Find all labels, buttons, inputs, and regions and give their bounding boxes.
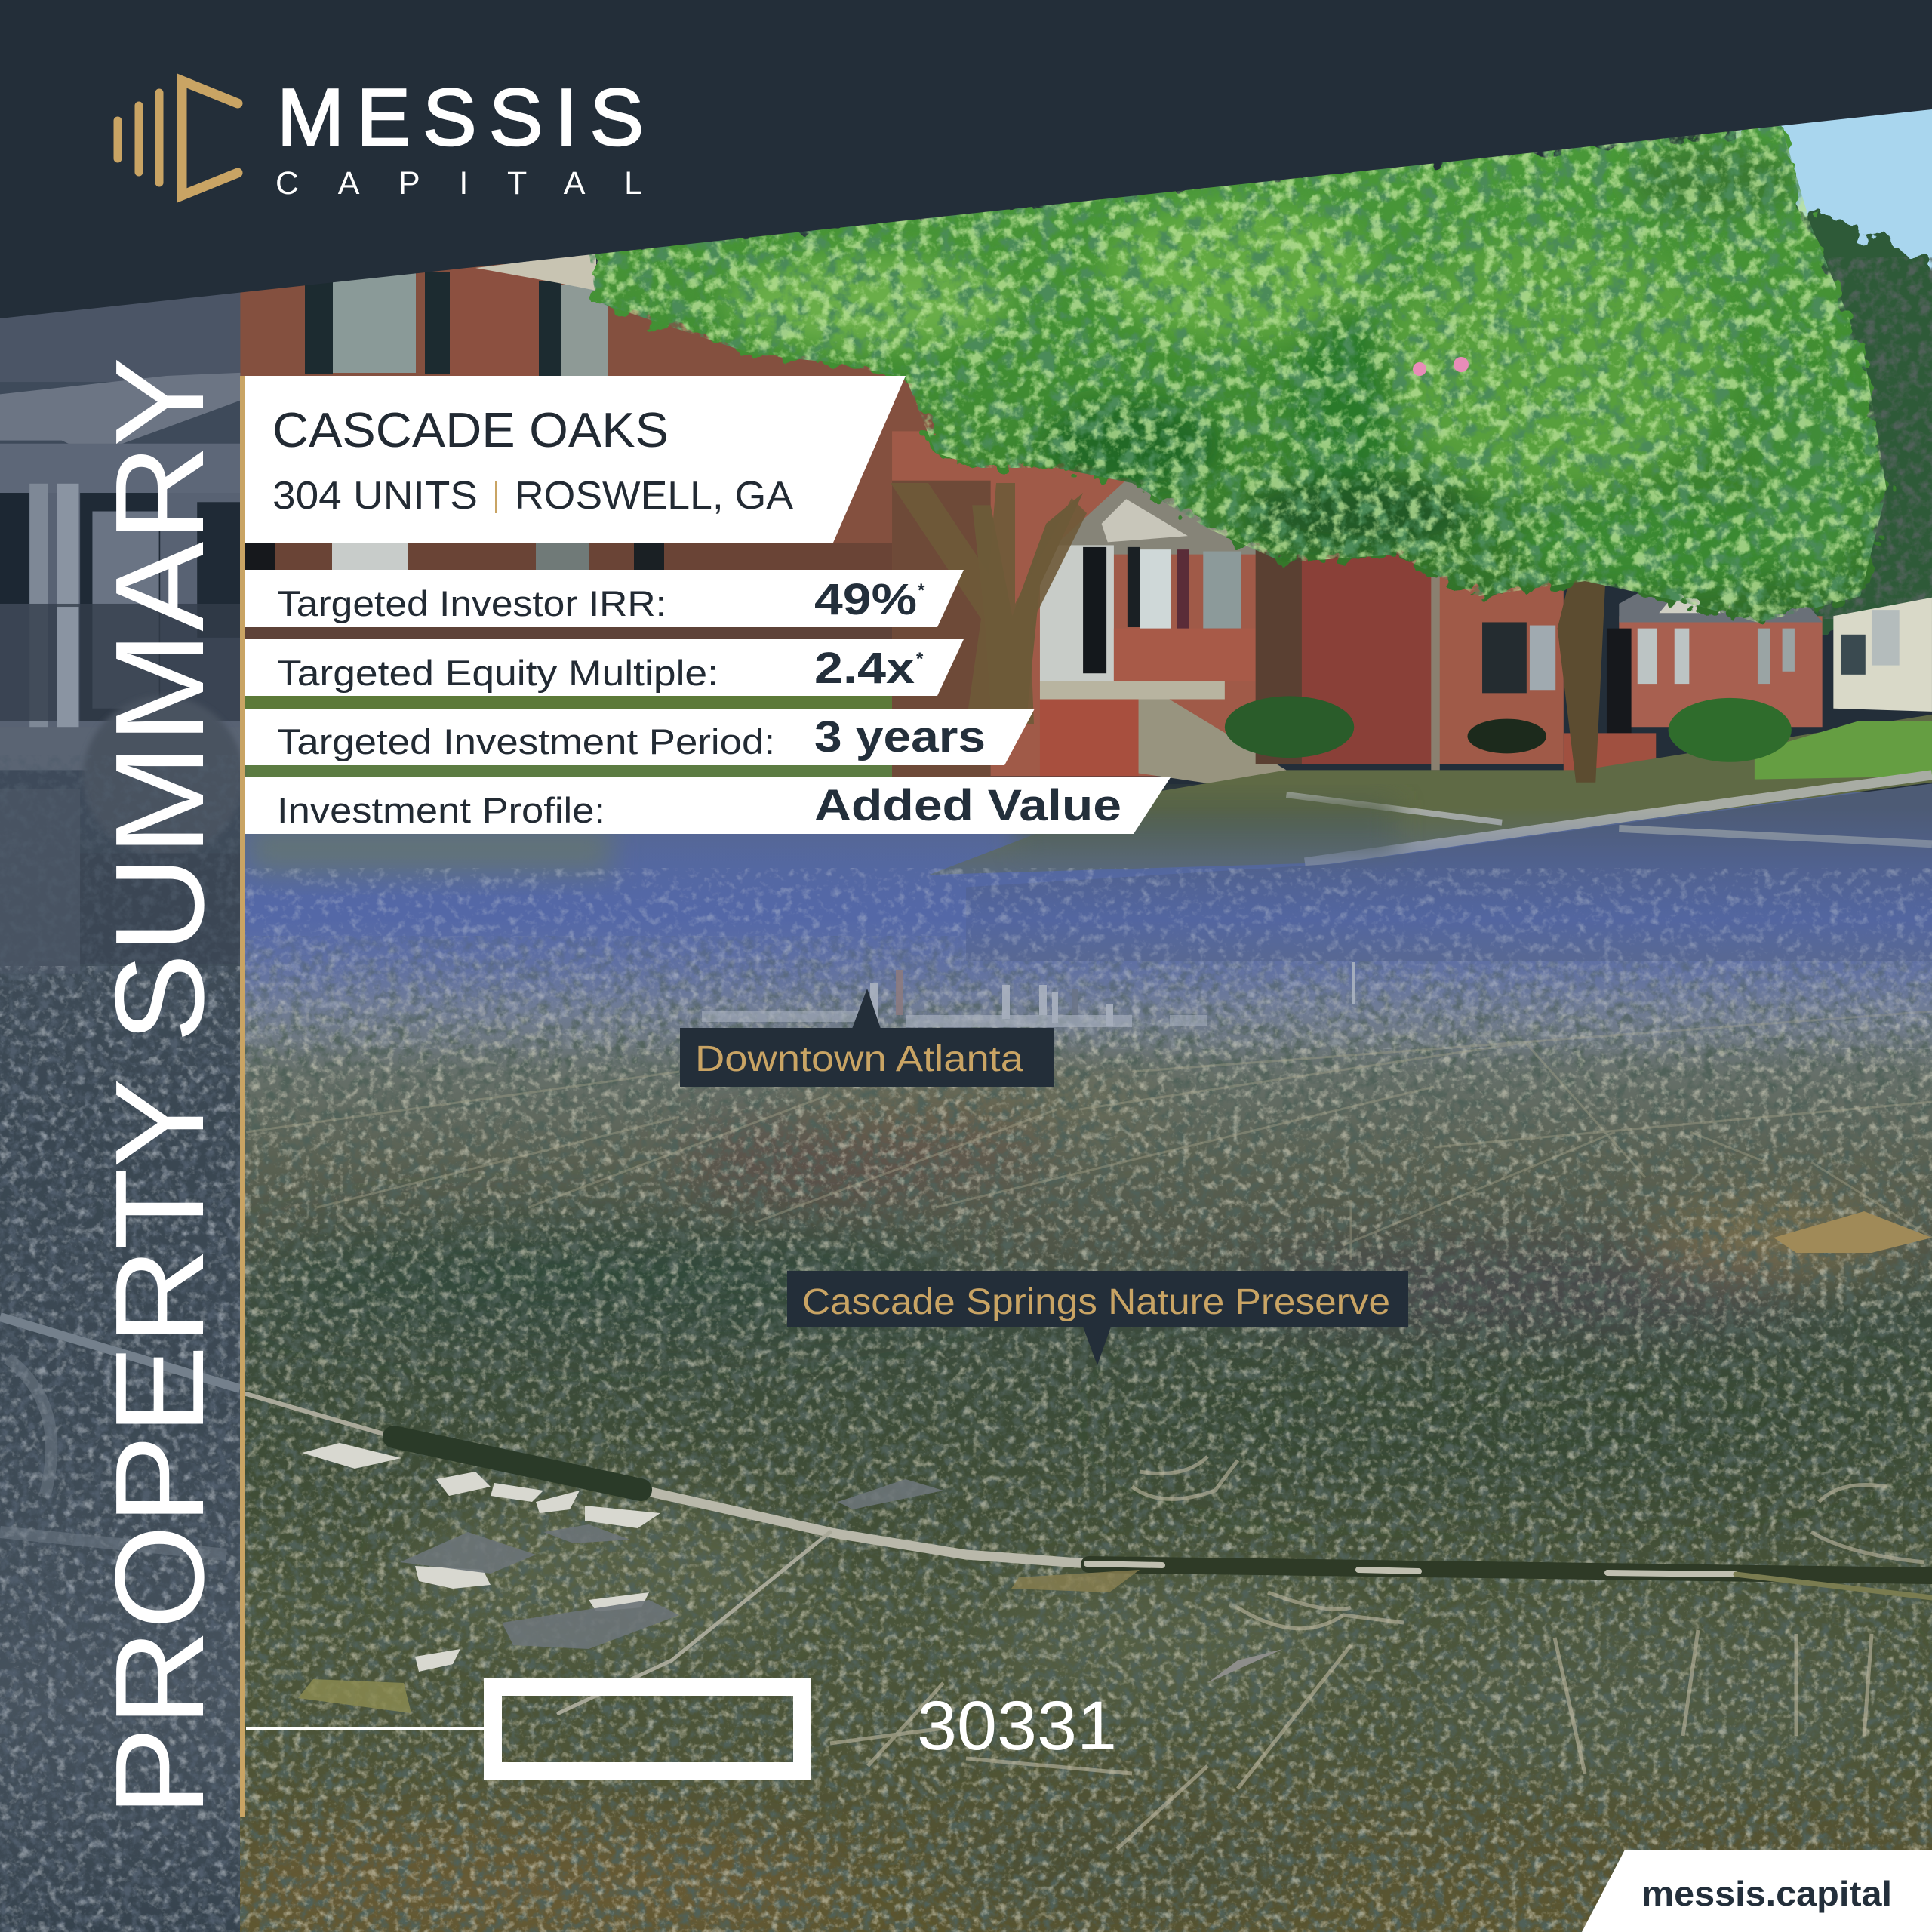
callout: Cascade Springs Nature Preserve [787,1271,1408,1365]
row: investment profile [245,777,1171,834]
grass fade under the info bars [249,800,1396,879]
location marker: zip code box [246,1687,1117,1771]
left grey panel [0,287,243,1932]
row: targeted investor IRR: Targeted Investor IRR: [277,583,666,623]
callout: downtown Atlanta [680,989,1054,1087]
highway [246,1394,1932,1713]
row: targeted investor IRR: * [918,580,925,601]
row: targeted equity multiple: 2.4x [814,644,915,693]
neighbourhood streets [830,1457,1924,1849]
marker frame [493,1687,802,1771]
units and location: 304 UNITS [272,474,478,518]
row: investment profile: Investment Profile: [277,790,605,830]
trunks [1558,555,1607,783]
background trees [1766,151,1932,626]
units and location: ROSWELL, GA [515,474,793,518]
haze texture [240,868,1932,1049]
vertical heading: PROPERTY SUMMARY [90,357,230,1817]
building upper left [240,264,980,641]
footer tab: website: messis.capital [1641,1874,1892,1913]
aerial photo background [240,792,1932,1932]
units and location [272,474,793,518]
logo mark [118,81,238,195]
row: targeted equity multiple: * [916,649,924,669]
row: targeted investor IRR [245,570,964,627]
apartment photo [240,91,1932,961]
logo: Messis Capital [118,72,644,202]
lawn and road [929,715,1932,875]
shrubs [1669,698,1792,762]
row: targeted investment period: 3 years [814,712,986,761]
row: targeted equity multiple [245,639,964,696]
row: targeted investment period [245,709,1035,765]
mid building [892,431,1932,961]
row: targeted investor IRR: 49% [814,575,917,624]
callout: Cascade Springs Nature Preserve: Cascade Springs Nature Preserve [802,1282,1390,1322]
row: targeted equity multiple: Targeted Equity Multiple: [277,653,718,693]
commercial buildings [302,1443,660,1789]
sky [1736,91,1932,287]
distant road grid [246,1011,1932,1260]
row: targeted investment period: Targeted Investment Period: [277,721,775,761]
trailer [1833,598,1932,712]
Atlanta skyline [702,962,1355,1049]
callout: downtown Atlanta: Downtown Atlanta [695,1039,1023,1079]
blue haze transition [240,808,1932,1057]
footer tab: website [1582,1850,1932,1932]
header band [0,0,1932,318]
zip code: 30331 [917,1687,1117,1764]
tagline: CAPITAL [275,165,642,202]
right porch row [1619,616,1823,727]
wordmark: MESSIS [277,72,644,162]
panel: property title [245,376,906,543]
leader line [246,1727,485,1730]
left tree trunks lower [891,483,1087,724]
row: investment profile: Added Value [814,781,1121,830]
property name: CASCADE OAKS [272,402,669,457]
leaf canopy [589,125,1887,623]
gold divider [240,376,245,1817]
crepe myrtle blossoms [1413,357,1469,376]
